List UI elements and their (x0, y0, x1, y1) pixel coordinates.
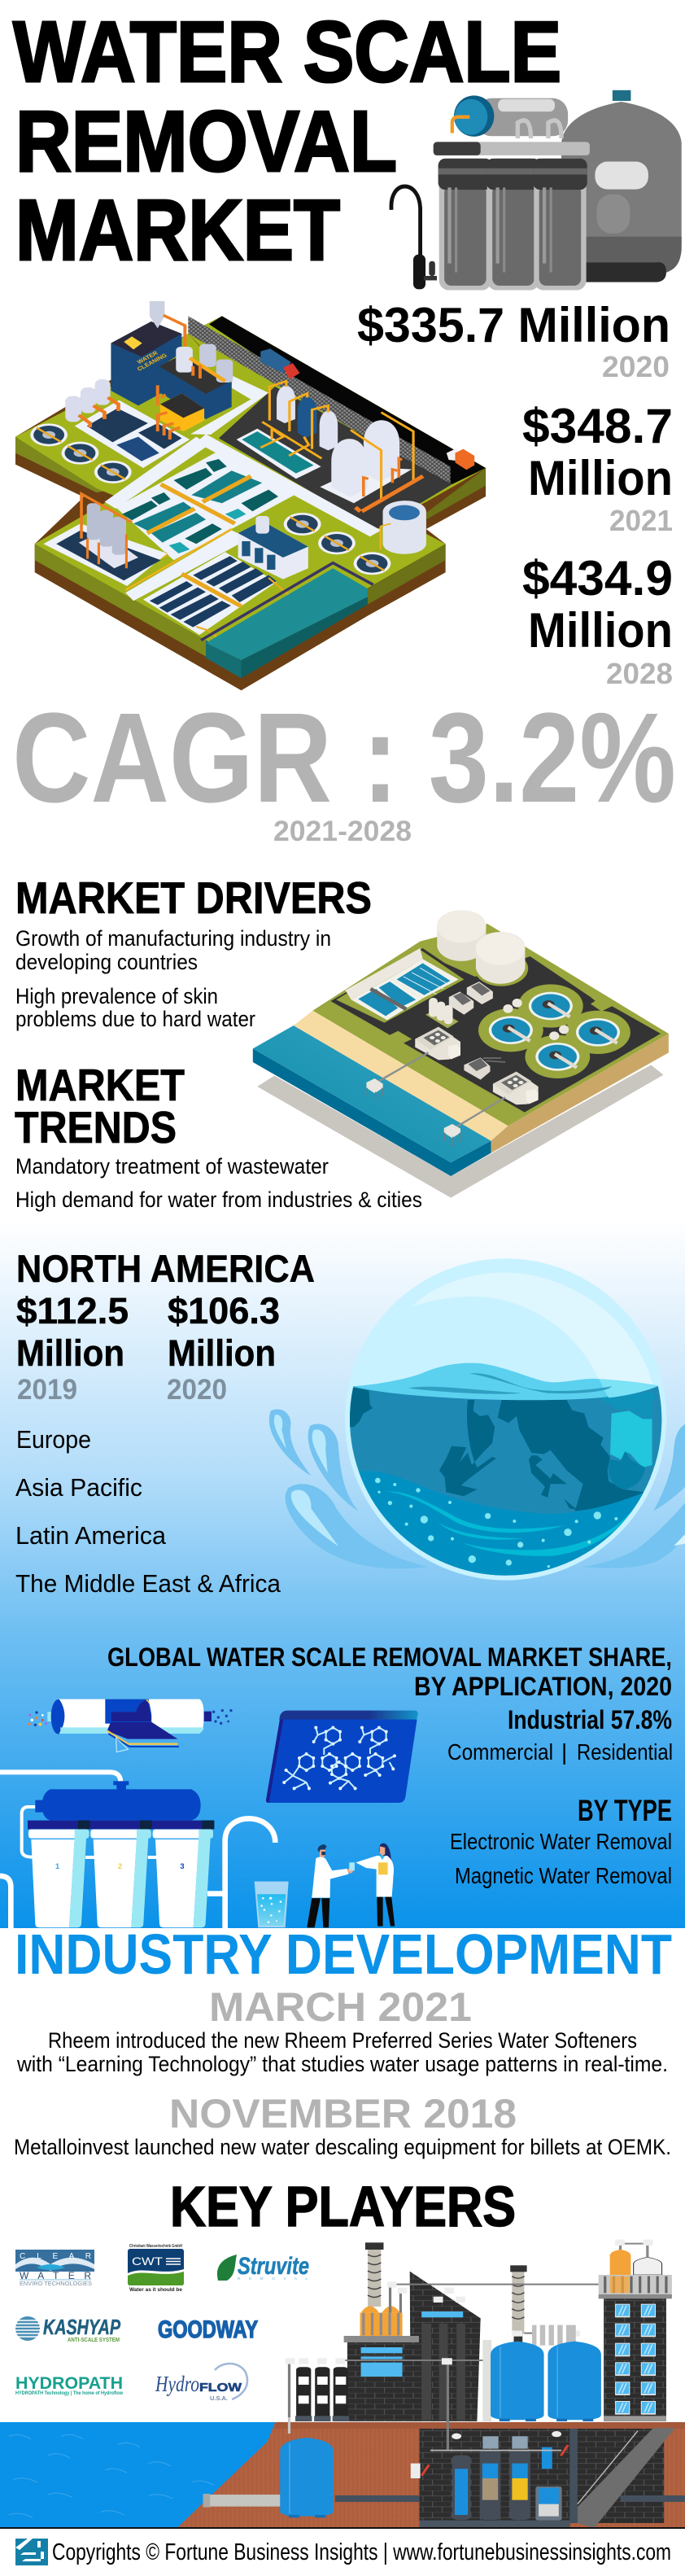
grey storage cylinders (65, 379, 111, 422)
apartment tower (599, 2240, 672, 2421)
title: REMOVAL (15, 94, 397, 190)
icon: glass of water (255, 1882, 289, 1927)
white water tank (381, 501, 426, 554)
divider line (0, 2527, 685, 2529)
regional text block (15, 1247, 315, 1598)
title: WATER SCALE (13, 4, 561, 100)
logo: Struvite: R E M O V A L (238, 2276, 308, 2281)
panel: market trends text: MARKET (15, 1060, 185, 1110)
filter beds (143, 552, 293, 641)
water surface (352, 1363, 658, 1400)
logo: Clear Water (15, 2250, 94, 2287)
regional text block: 2019 (17, 1374, 77, 1406)
teal reservoir (201, 563, 373, 660)
continents (348, 1388, 644, 1511)
panel: market drivers text (15, 873, 372, 1031)
regional text block: Million (16, 1332, 124, 1374)
icon: membrane roll (28, 1699, 233, 1752)
panel: market drivers text: Growth of manufacturing industry in (15, 926, 331, 951)
plant base and sides (15, 316, 486, 690)
panel: market drivers text: problems due to hard water (15, 1007, 255, 1031)
icon: white three-stage water filter: 1 (55, 1862, 59, 1870)
market share by application text (107, 1642, 673, 1765)
logo: CWT (128, 2244, 184, 2293)
illustration: water globe (342, 1258, 685, 1589)
water body (0, 2422, 275, 2528)
logo: Hydropath: HYDROPATH (15, 2374, 123, 2393)
vehicles (260, 348, 474, 470)
logo: Kashyap (15, 2315, 120, 2343)
market value figures: $335.7 Million (357, 298, 670, 352)
icon: two scientists exchanging a water sample (307, 1843, 395, 1927)
logo: Clear Water: C L E A R (20, 2252, 91, 2261)
regional text block: 2020 (167, 1374, 227, 1406)
CAGR headline: 2021-2028 (273, 816, 412, 847)
icon: white three-stage water filter (0, 1772, 275, 1928)
brick factory buildings (344, 2272, 481, 2421)
panel: market drivers text: MARKET DRIVERS (15, 873, 372, 923)
development: November 2018: NOVEMBER 2018 (169, 2091, 517, 2136)
small blue roof building (238, 516, 308, 579)
logo: Hydropath: HYDROPATH Technology | The home of Hydroflow (15, 2390, 124, 2396)
icon: grey reverse osmosis filter with faucet (391, 90, 682, 291)
panel: market trends text: TRENDS (15, 1102, 177, 1152)
logo: CWT: Water as it should be (129, 2288, 183, 2293)
logo: Kashyap: KASHYAP (43, 2315, 120, 2339)
icon: tablet with molecule diagram (266, 1711, 418, 1803)
black road and fence (188, 316, 486, 530)
white roads (105, 376, 382, 601)
panel: market drivers text: developing countries (15, 950, 198, 974)
logo: Clear Water: W A T E R (20, 2270, 91, 2281)
building: water cleaning: CLEANING (136, 352, 168, 373)
logo: HydroFlow (155, 2364, 247, 2402)
illustration: industrial water treatment plant with underground room (0, 2240, 685, 2528)
by type text (450, 1794, 672, 1888)
panel: market trends text (15, 1060, 422, 1212)
logo: HydroFlow: U.S.A. (210, 2396, 228, 2402)
illustration: coastal desalination plant (253, 910, 669, 1198)
row of small filter tanks (295, 2367, 349, 2421)
logo: Kashyap: ANTI-SCALE SYSTEM (68, 2336, 120, 2343)
scientist: man (307, 1844, 353, 1927)
regional text block: Million (168, 1332, 276, 1374)
regional text block: Asia Pacific (15, 1473, 142, 1502)
logo: Clear Water: ENVIRO TECHNOLOGIES (20, 2281, 92, 2287)
market value figures: 2021 (609, 504, 673, 537)
large blue tanks (491, 2342, 601, 2421)
illustration: isometric water treatment plant (15, 301, 486, 690)
logo: HydroFlow: FLOW (199, 2381, 242, 2394)
scientist: woman (356, 1843, 395, 1927)
aeration tanks (116, 452, 295, 590)
settling basins upper pad (75, 400, 190, 468)
clarifiers (478, 1008, 543, 1052)
pump houses, intakes and small units (366, 982, 569, 1146)
illustration: water splash (269, 1410, 428, 1568)
panel: blue gradient background (0, 1221, 685, 1928)
regional text block: $106.3 (168, 1290, 280, 1332)
regional text block: $112.5 (16, 1290, 129, 1332)
icon: white three-stage water filter: 3 (180, 1862, 185, 1870)
regional text block: NORTH AMERICA (16, 1247, 315, 1290)
title: MARKET (15, 182, 340, 278)
development: November 2018 (14, 2091, 671, 2159)
market value figures: $434.9 (522, 551, 673, 606)
logo: CWT: Christiani Wassertechnik GmbH (129, 2244, 182, 2249)
logo: CWT: CWT (132, 2255, 164, 2268)
market value figures (357, 298, 673, 690)
settling tanks (336, 948, 464, 1023)
section heading: key players: KEY PLAYERS (170, 2175, 516, 2238)
ground (0, 2422, 685, 2528)
regional text block: The Middle East & Africa (15, 1569, 281, 1598)
logo: HydroFlow: Hydro (155, 2372, 199, 2396)
building: water cleaning (111, 301, 233, 440)
underground tank and pipe (203, 2417, 334, 2517)
square basin with stacked tanks (43, 494, 168, 586)
development: March 2021: MARCH 2021 (209, 1984, 472, 2030)
building: water cleaning: WATER (136, 349, 159, 365)
right splash (583, 1424, 685, 1568)
panel: market trends text: High demand for water from industries & cities (15, 1187, 422, 1212)
logo: Struvite: Struvite (238, 2253, 309, 2280)
regional text block: Europe (16, 1425, 91, 1454)
logo: Goodway: GOODWAY (158, 2316, 258, 2343)
yard pool and pressure vessels (237, 381, 423, 511)
regional text block: Latin America (15, 1521, 167, 1550)
title (13, 4, 561, 278)
market share by application text: | (561, 1739, 567, 1765)
storage tanks (437, 910, 528, 986)
panel: market trends text: Mandatory treatment of wastewater (15, 1154, 329, 1179)
logo: Struvite (217, 2253, 309, 2281)
market value figures: 2020 (602, 350, 670, 383)
panel: market drivers text: High prevalence of skin (15, 984, 218, 1008)
lower wave (359, 1472, 644, 1576)
market value figures: $348.7 (522, 399, 673, 453)
icon: white three-stage water filter: 2 (118, 1862, 122, 1870)
pipework and fittings (286, 2281, 599, 2450)
market value figures: 2028 (606, 657, 673, 690)
chimneys (365, 2242, 527, 2346)
market share by application text: Commercial (447, 1739, 553, 1765)
market value figures: Million (528, 451, 673, 505)
icon: Fortune Business Insights logo (15, 2539, 48, 2565)
market value figures: Million (528, 603, 673, 658)
development: March 2021 (16, 1984, 668, 2076)
underground room (335, 2428, 685, 2528)
